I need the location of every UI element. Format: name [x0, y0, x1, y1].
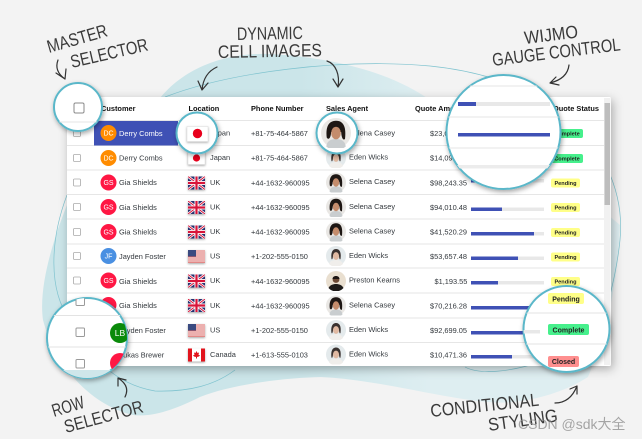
row 10: Eden Wicks — [349, 350, 388, 358]
header row: Quote Amount — [415, 104, 467, 113]
callout: dynamic cell images — [218, 23, 322, 62]
arrow: to row selector — [118, 378, 127, 397]
callout: dynamic cell images: DYNAMIC — [237, 23, 303, 44]
row 10: Canada — [210, 350, 237, 359]
row 7: UK — [210, 276, 220, 285]
header row: Location — [188, 104, 220, 113]
magnifier: Japan flag — [176, 112, 218, 154]
callout: master selector: SELECTOR — [68, 35, 150, 72]
row 2: Derry Combs — [119, 154, 163, 162]
row 10: Lukas Brewer — [119, 350, 165, 360]
row 6: Eden Wicks — [349, 251, 388, 260]
row 3: +44-1632-960095 — [251, 178, 310, 188]
selected customer cell — [94, 121, 178, 146]
row 2: Japan — [210, 153, 230, 162]
arrow: to status — [555, 386, 577, 403]
row 4 — [74, 197, 580, 218]
row 5: Gia Shields — [119, 228, 157, 236]
row 2: $14,090.65 — [430, 154, 467, 162]
callout: dynamic cell images: CELL IMAGES — [218, 40, 322, 62]
row 7: +44-1632-960095 — [251, 277, 310, 286]
row 9: Jayden Foster — [119, 326, 166, 335]
row 5: $41,520.29 — [430, 228, 467, 236]
row 5: UK — [210, 227, 220, 236]
row 2: DC — [103, 156, 114, 162]
row 6: Pending — [554, 255, 577, 261]
row 2: Complete — [554, 156, 580, 162]
callout: row selector: SELECTOR — [62, 397, 145, 437]
magnifier: conditional styling — [523, 286, 610, 372]
arrow: to agent — [327, 61, 343, 87]
row 1: Selena Casey — [349, 128, 395, 138]
magnifier: gauge control — [446, 75, 561, 189]
magnifier: row selector: LB — [115, 328, 126, 338]
data grid panel — [67, 97, 611, 366]
row 1: $23,010.65 — [430, 129, 467, 138]
row 3: $98,243.35 — [430, 178, 467, 188]
header row: Phone Number — [251, 104, 304, 113]
magnifier: conditional styling: Complete — [553, 328, 585, 334]
row 10: +1-613-555-0103 — [251, 350, 308, 360]
row 3: Gia Shields — [119, 178, 157, 187]
arrow: to gauge — [550, 65, 569, 85]
row 8: +44-1632-960095 — [251, 302, 310, 310]
row 7 — [74, 271, 580, 291]
row 9: US — [210, 326, 220, 334]
row 1 — [74, 123, 583, 144]
row 2: +81-75-464-5867 — [251, 154, 308, 162]
row 9 — [119, 320, 544, 341]
row 6: JF — [105, 254, 112, 260]
row 9: $92,699.05 — [430, 326, 467, 335]
row 2: Eden Wicks — [349, 152, 388, 162]
magnifier: conditional styling: Closed — [552, 359, 575, 366]
arrow: to flag — [198, 67, 217, 90]
row 4: Selena Casey — [349, 202, 395, 211]
callout: conditional styling: CONDITIONAL — [429, 390, 540, 421]
row 7: Preston Kearns — [349, 276, 400, 284]
row 4: $94,010.48 — [430, 203, 467, 212]
row 5: Selena Casey — [349, 226, 395, 236]
row 8: UK — [210, 301, 220, 310]
row 4: +44-1632-960095 — [251, 203, 310, 212]
row 10 — [119, 344, 544, 365]
magnifier: master selector — [54, 83, 102, 131]
magnifier: agent photo — [316, 112, 358, 154]
row 7: $1,193.55 — [434, 277, 467, 286]
callout: master selector — [45, 21, 150, 72]
row 6: Jayden Foster — [119, 252, 166, 261]
header row: Quote Status — [553, 104, 599, 113]
row 6: US — [210, 252, 220, 260]
row 8 — [100, 296, 544, 317]
watermark: CSDN @sdk大全 — [518, 416, 626, 432]
row 3: Pending — [554, 181, 577, 187]
row 1: Complete — [554, 132, 580, 138]
row 7: Pending — [554, 280, 577, 286]
row 4: Pending — [554, 206, 577, 212]
row 9: +1-202-555-0150 — [251, 326, 308, 335]
row 4: GS — [103, 204, 114, 212]
row 4: UK — [210, 202, 220, 212]
row 5 — [74, 222, 580, 243]
row 5: +44-1632-960095 — [251, 228, 310, 236]
callout: wijmo gauge control: WIJMO — [523, 22, 579, 48]
decorative teal blob — [42, 54, 621, 415]
magnifier: conditional styling: Pending — [552, 296, 580, 304]
scrollbar — [604, 98, 610, 365]
row 8: Gia Shields — [119, 301, 157, 310]
row 3: UK — [210, 178, 220, 187]
row 8: $70,216.28 — [430, 302, 467, 310]
header row: Sales Agent — [326, 104, 369, 113]
row 7: GS — [103, 278, 114, 285]
row 1: +81-75-464-5867 — [251, 129, 308, 138]
row 3 — [74, 172, 580, 194]
row 9: Eden Wicks — [349, 325, 388, 334]
callout: row selector: ROW — [49, 392, 87, 421]
row 6: +1-202-555-0150 — [251, 252, 308, 261]
row 5: GS — [103, 230, 114, 236]
row 1: Derry Combs — [119, 129, 163, 138]
grid row separators — [67, 120, 604, 342]
row 8: Selena Casey — [349, 300, 395, 310]
row 1: Japan — [210, 128, 230, 138]
row 3: Selena Casey — [349, 177, 395, 186]
header row: Customer — [101, 104, 136, 113]
row 10: $10,471.36 — [430, 350, 467, 360]
row 1: DC — [103, 130, 114, 138]
arrow: master selector — [56, 60, 66, 79]
row 7: Gia Shields — [119, 277, 157, 286]
row 6 — [74, 246, 580, 267]
row 4: Gia Shields — [119, 203, 157, 212]
row 5: Pending — [554, 230, 577, 236]
magnifier: row selector — [47, 291, 130, 378]
row 6: $53,657.48 — [430, 252, 467, 261]
callout: conditional styling: STYLING — [487, 405, 559, 435]
row 3: GS — [103, 180, 114, 187]
callout: conditional styling — [429, 390, 559, 435]
header row — [101, 104, 599, 113]
callout: master selector: MASTER — [45, 21, 110, 57]
row 2 — [74, 148, 583, 169]
